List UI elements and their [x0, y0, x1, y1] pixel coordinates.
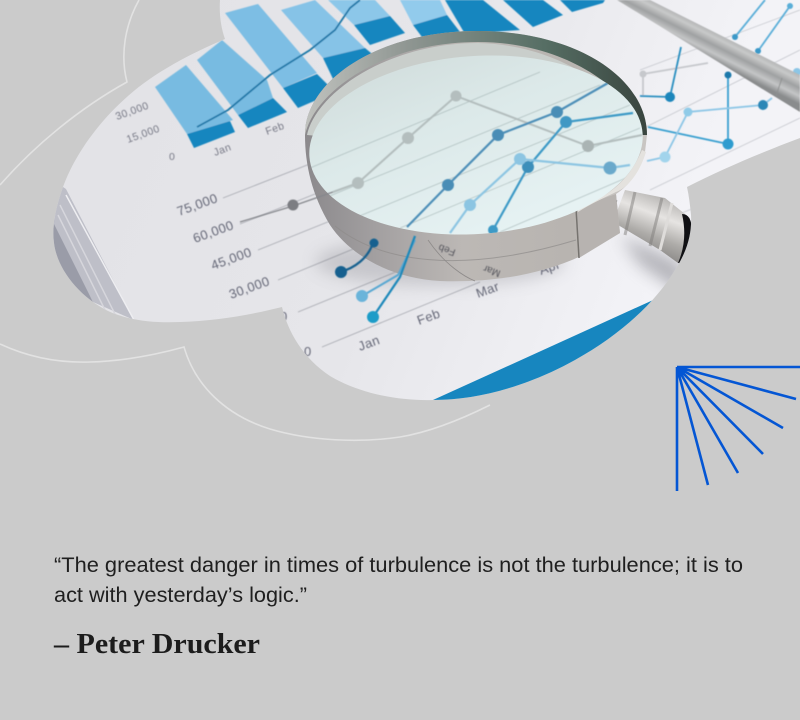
line chart right side: [640, 0, 800, 162]
magnifier and handle cast shadow: [314, 234, 679, 292]
line chart gridlines and labels: Jan: [356, 332, 382, 354]
blue strip at bottom of page: [433, 300, 652, 400]
line chart gridlines and labels: 45,000: [209, 244, 254, 273]
paper background: [63, 0, 800, 400]
line chart gridlines and labels: [175, 10, 800, 359]
photo: magnifying glass over charts, cloud-clipped: [54, 0, 800, 400]
quote text: “The greatest danger in times of turbulence is not the turbulence; it is to: [54, 554, 743, 577]
line chart gridlines and labels: 30,000: [227, 273, 272, 302]
bar chart axis labels: [114, 100, 286, 163]
reflected axis labels on magnifier band: Feb: [437, 241, 457, 257]
line chart gridlines and labels: 0: [280, 309, 288, 324]
quote text: [54, 554, 743, 607]
bar chart axis labels: Feb: [264, 120, 286, 138]
bar chart: [155, 0, 605, 148]
bar chart axis labels: Jan: [212, 141, 233, 159]
quote attribution: – Peter Drucker: [53, 629, 260, 660]
quote text: act with yesterday’s logic.”: [54, 584, 307, 607]
magnifying glass lens: [309, 56, 643, 234]
line chart gridlines and labels: Feb: [415, 306, 442, 328]
line chart gridlines and labels: Apr: [537, 256, 562, 278]
reflected axis labels on magnifier band: [438, 244, 501, 278]
line chart gridlines and labels: Mar: [474, 279, 501, 301]
bar chart axis labels: 30,000: [114, 100, 150, 123]
line chart gridlines and labels: 0: [304, 344, 312, 359]
bar chart axis labels: 15,000: [125, 123, 161, 146]
line chart gridlines and labels: 60,000: [191, 217, 236, 246]
magnifying glass body: [305, 31, 647, 281]
reflected axis labels on magnifier band: Mar: [482, 262, 502, 278]
decorative outline: ghost cloud upper left: [0, 0, 490, 440]
decorative burst icon: [677, 367, 800, 491]
bar chart axis labels: 0: [169, 151, 175, 163]
line chart gridlines and labels: 75,000: [175, 190, 220, 219]
book page stack: [53, 187, 134, 320]
magnifying glass handle: [612, 190, 692, 264]
line chart left side outside lens: [240, 192, 415, 323]
pen: [617, 0, 800, 112]
